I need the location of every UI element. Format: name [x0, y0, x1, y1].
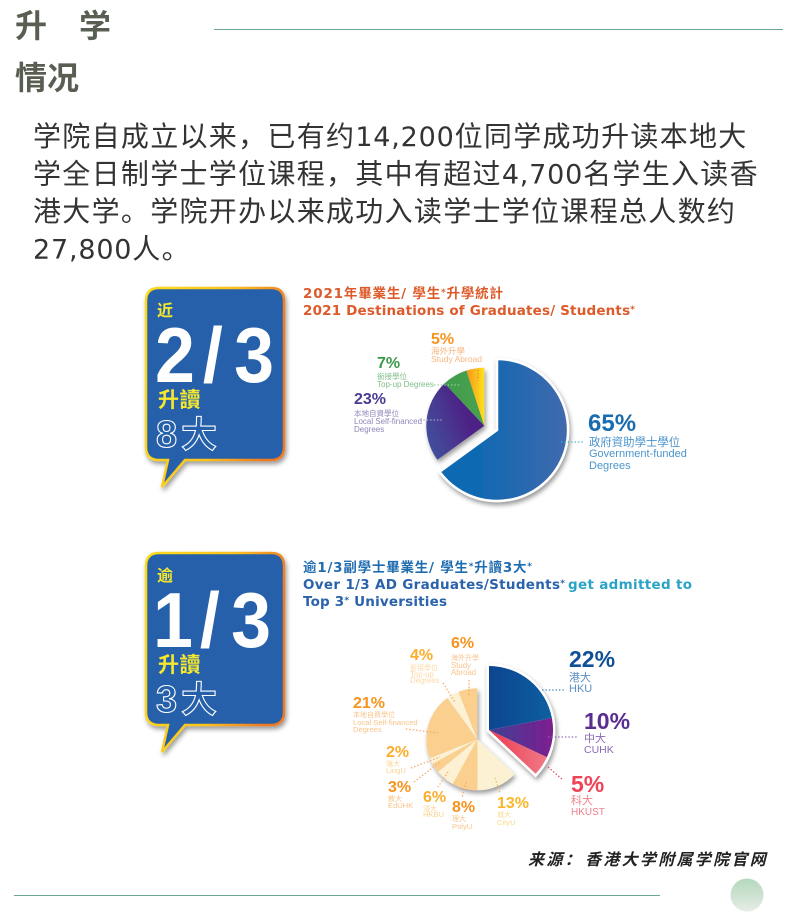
label: 8% PolyU: 理大 [452, 814, 466, 823]
label: 23% local self-financed: Degrees [354, 425, 384, 434]
intro paragraph: 27,800人。 [33, 234, 191, 266]
label: 65% government-funded: 65% [588, 410, 636, 437]
label: 21% local self-financed: Local Self-financed [353, 718, 418, 727]
label: 6% HKBU: HKBU [423, 810, 444, 819]
heading: top 3 universities: * [344, 596, 349, 606]
label: 65% government-funded: Degrees [589, 460, 631, 472]
heading: top 3 universities: * [527, 562, 532, 572]
callout: over 1/3 to top 3 [146, 553, 284, 752]
heading: 2021 destinations [303, 285, 635, 319]
heading: top 3 universities: Over 1/3 AD Graduates/Students [303, 577, 560, 593]
slices: other destinations [426, 368, 484, 460]
intro paragraph: 学院自成立以来，已有约14,200位同学成功升读本地大 [33, 121, 748, 153]
label: 21% local self-financed: 21% [353, 695, 385, 712]
source name: 香港大学附属学院官网 [585, 851, 768, 869]
label: 4% top-up: Top-up [410, 670, 435, 679]
label: 23% local self-financed: 23% [354, 391, 386, 408]
label: 65% government-funded: Government-funded [589, 448, 687, 460]
label: 2% LingU: 嶺大 [386, 759, 400, 768]
label: 22% HKU: HKU [569, 683, 592, 695]
label: 7% top-up: 7% [377, 355, 400, 372]
heading: top 3 universities: Universities [349, 594, 447, 610]
title: 情况 [15, 60, 79, 96]
label: 23% local self-financed [354, 391, 422, 434]
heading: 2021 destinations: 2021 Destinations of Graduates/ Students [303, 303, 630, 319]
label: 6% study abroad [451, 635, 479, 677]
label: 7% top-up: 銜接學位 [377, 371, 407, 381]
slices: other destinations [426, 688, 514, 790]
decorative circle [730, 878, 764, 912]
label: 21% local self-financed: 本地自資學位 [353, 710, 395, 719]
label: 3% EdUHK: 教大 [388, 794, 402, 803]
title [15, 8, 111, 96]
heading: top 3 universities: Top 3 [303, 594, 344, 610]
heading: top 3 universities: * [560, 579, 565, 589]
label: 5% study abroad: 海外升學 [431, 346, 466, 356]
label: 10% CUHK: 10% [584, 708, 630, 734]
label: 6% HKBU: 浸大 [423, 804, 437, 813]
callout: over 1/3 to top 3: 逾 [157, 566, 173, 585]
heading: 2021 destinations: * [441, 288, 446, 298]
label: 21% local self-financed [353, 695, 418, 734]
label: 65% government-funded [588, 410, 687, 472]
heading: top 3 universities: get admitted to [568, 577, 692, 593]
heading: 2021 destinations: * [630, 305, 635, 315]
label: 5% HKUST: 5% [571, 771, 604, 797]
label: 6% HKBU [423, 789, 446, 819]
heading: 2021 destinations: 2021年畢業生/ 學生 [303, 286, 440, 302]
label: 22% HKU: 22% [569, 646, 615, 672]
pie chart: 2021 destinations [420, 359, 583, 501]
label: 6% HKBU: 6% [423, 789, 446, 806]
callout: over 1/3 to top 3: 1/3 [153, 576, 271, 664]
slices: HKU, CUHK, HKUST [489, 666, 553, 774]
label: 5% HKUST [571, 771, 605, 818]
label: 13% CityU: 13% [497, 795, 529, 812]
label: 10% CUHK: CUHK [584, 744, 614, 756]
heading: 2021 destinations: 升學統計 [447, 285, 503, 302]
label: 4% top-up: 銜接學位 [410, 663, 438, 672]
label: 6% study abroad: Abroad [451, 668, 476, 677]
label: 23% local self-financed: 本地自資學位 [354, 408, 399, 418]
label: 3% EdUHK [388, 779, 413, 810]
label: 6% study abroad: Study [451, 661, 471, 670]
label: 5% study abroad: Study Abroad [431, 354, 482, 364]
label: 5% HKUST: HKUST [571, 807, 605, 818]
label: 10% CUHK: 中大 [584, 731, 606, 745]
heading: top 3 universities [303, 559, 692, 610]
callout: nearly 2/3 to top 8: 2/3 [155, 311, 274, 399]
label: 5% study abroad [431, 331, 482, 364]
intro paragraph [33, 121, 759, 266]
label: 4% top-up: Degrees [410, 676, 440, 685]
label: 5% HKUST: 科大 [571, 793, 593, 807]
title: 升 [15, 8, 47, 44]
label: 8% PolyU: PolyU [452, 822, 472, 831]
heading: top 3 universities: 升讀3大 [474, 559, 527, 576]
label: 13% CityU: CityU [497, 818, 516, 827]
label: 10% CUHK [584, 708, 630, 756]
callout: over 1/3 to top 3: 3 [156, 679, 177, 721]
label: 3% EdUHK: EdUHK [388, 801, 413, 810]
label: 4% top-up [410, 647, 440, 685]
label: 23% local self-financed: Local Self-financed [354, 417, 422, 426]
label: 22% HKU [569, 646, 615, 695]
label: 6% study abroad: 海外升學 [451, 653, 479, 662]
label: 8% PolyU [452, 799, 475, 831]
slice: government-funded 65% [440, 359, 568, 501]
callout: nearly 2/3 to top 8 [146, 288, 284, 487]
heading: top 3 universities: * [469, 562, 474, 572]
heading: top 3 universities: 逾1/3副學士畢業生/ 學生 [303, 560, 468, 576]
label: 2% LingU: 2% [386, 744, 409, 761]
label: 13% CityU [497, 795, 529, 827]
source note: 来源： [528, 851, 583, 869]
label: 8% PolyU: 8% [452, 799, 475, 816]
label: 7% top-up: Top-up Degrees [377, 380, 434, 389]
intro paragraph: 学全日制学士学位课程，其中有超过4,700名学生入读香 [33, 158, 759, 190]
callout: nearly 2/3 to top 8: 8 [156, 414, 177, 456]
label: 7% top-up [377, 355, 434, 389]
label: 4% top-up: 4% [410, 647, 433, 664]
label: 3% EdUHK: 3% [388, 779, 411, 796]
callout: over 1/3 to top 3: 大 [181, 679, 217, 720]
title: 学 [79, 8, 111, 44]
label: 65% government-funded: 政府資助學士學位 [589, 435, 680, 449]
label: 13% CityU: 城大 [497, 810, 511, 819]
callout: nearly 2/3 to top 8: 近 [157, 302, 173, 320]
label: 6% study abroad: 6% [451, 635, 474, 652]
label: 22% HKU: 港大 [569, 670, 591, 684]
pie chart: top 3 admissions [406, 666, 578, 798]
callout: nearly 2/3 to top 8: 大 [181, 414, 217, 455]
label: 2% LingU [386, 744, 409, 775]
label: 5% study abroad: 5% [431, 331, 454, 348]
callout: over 1/3 to top 3: 升讀 [158, 654, 201, 677]
label: 21% local self-financed: Degrees [353, 725, 382, 734]
intro paragraph: 港大学。学院开办以来成功入读学士学位课程总人数约 [33, 196, 736, 227]
callout: nearly 2/3 to top 8: 升讀 [158, 389, 201, 412]
label: 2% LingU: LingU [386, 766, 406, 775]
